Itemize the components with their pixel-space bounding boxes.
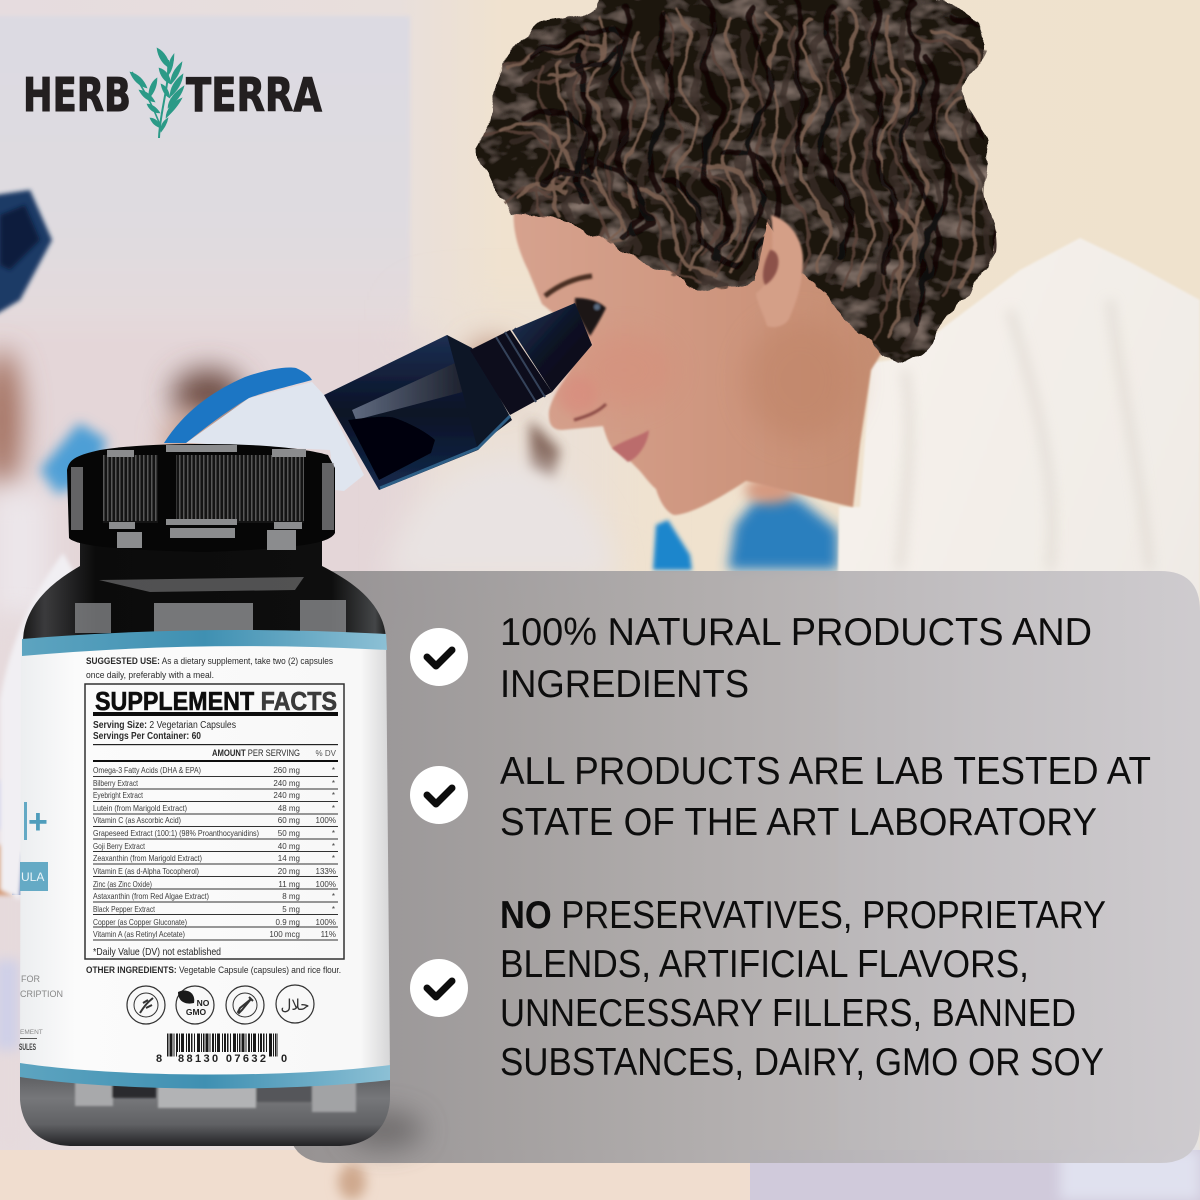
barcode (156, 1045, 287, 1065)
front label fragments (19, 802, 63, 1052)
benefit text 1: 100% NATURAL PRODUCTS AND (500, 611, 1092, 654)
woman: cheek blush (575, 332, 675, 408)
ingredient rows: 100% (316, 816, 336, 825)
grey translucent text panel (288, 571, 1200, 1163)
product bottle (19, 444, 390, 1146)
supplement facts table: *Daily Value (DV) not established (93, 946, 221, 958)
ingredient rows: 50 mg (278, 829, 300, 838)
ingredient rows: 133% (316, 867, 336, 876)
supplement facts table: Serving Size: 2 Vegetarian Capsules (93, 720, 236, 731)
bottle ground shadow (347, 1112, 423, 1148)
head (324, 335, 492, 490)
ingredient rows: 100% (316, 918, 336, 927)
suggested use: once daily, preferably with a meal. (86, 670, 214, 681)
ingredient rows: 40 mg (278, 842, 300, 851)
ingredient rows: 14 mg (278, 854, 300, 863)
ingredient rows: 20 mg (278, 867, 300, 876)
bottle cap (67, 444, 335, 552)
ingredient rows: 100 mcg (269, 930, 300, 939)
ingredient rows: Zinc (as Zinc Oxide) (93, 880, 152, 889)
other ingredients: OTHER INGREDIENTS: Vegetable Capsule (capsules) and rice flour. (86, 965, 341, 976)
benefit text 3: BLENDS, ARTIFICIAL FLAVORS, (500, 943, 1029, 986)
ingredient rows: 11% (321, 930, 336, 939)
ingredient rows: 5 mg (282, 905, 300, 914)
label paper (20, 634, 390, 1080)
front label fragments: CRIPTION (20, 989, 63, 999)
bottom strip below the panel (0, 1150, 1200, 1200)
woman: face and neck (514, 170, 890, 515)
barcode: 0 (281, 1053, 287, 1065)
lower edge (380, 416, 510, 488)
woman: ear (756, 215, 803, 327)
ingredient rows: Bilberry Extract (93, 779, 139, 788)
supplement facts table: Servings Per Container: 60 (93, 731, 201, 742)
top blue band (22, 630, 387, 656)
front label fragments: EMENT (20, 1029, 43, 1036)
supplement facts table: AMOUNT PER SERVING (212, 748, 300, 758)
woman: inner ear (763, 250, 778, 285)
head highlight (352, 363, 470, 420)
ingredient rows: * (332, 842, 335, 851)
cap smooth gap (158, 450, 176, 525)
suggested use: SUGGESTED USE: As a dietary supplement, take two (2) capsules (86, 656, 333, 667)
benefit text 3 (500, 894, 1106, 1084)
ring ridges (496, 328, 552, 402)
ingredient rows: Grapeseed Extract (100:1) (98% Proanthocyanidins) (93, 829, 259, 838)
bottom blue band (20, 1063, 390, 1089)
ingredient rows: * (332, 829, 335, 838)
badge: gluten free (127, 986, 165, 1024)
cap grey facets (71, 445, 334, 550)
benefit text 2: STATE OF THE ART LABORATORY (500, 801, 1097, 844)
ingredient rows: * (332, 854, 335, 863)
ingredient rows: Vitamin E (as d-Alpha Tocopherol) (93, 867, 199, 876)
ingredient rows: 240 mg (273, 779, 300, 788)
barcode: 88130 07632 (178, 1053, 266, 1065)
benefit text 2 (500, 750, 1151, 844)
check icon 1 (410, 628, 468, 686)
ingredient rows: * (332, 779, 335, 788)
woman: neck shadow (745, 320, 855, 440)
ingredient rows: * (332, 905, 335, 914)
benefit text 3: NO PRESERVATIVES, PROPRIETARY (500, 894, 1106, 937)
front label fragments: SULES (19, 1042, 36, 1052)
front label fragments: + (28, 803, 48, 841)
cap ribbed section (103, 455, 304, 523)
knurled ring (470, 330, 552, 415)
badge: no gmo (176, 986, 214, 1024)
ingredient rows: 48 mg (278, 804, 300, 813)
logo leaf sprig (130, 48, 184, 138)
supplement facts table (85, 684, 344, 959)
microscope: eyepiece and head (324, 303, 592, 490)
table heading: SUPPLEMENT FACTS (95, 686, 337, 716)
woman: coat folds (900, 300, 1150, 570)
badge: halal (276, 985, 314, 1023)
ingredient rows: Vitamin A (as Retinyl Acetate) (93, 930, 185, 939)
ingredient rows: * (332, 791, 335, 800)
ingredient rows: 260 mg (273, 766, 300, 775)
barcode: 8 (156, 1053, 162, 1065)
woman: curly hair mass (481, 0, 997, 363)
barrel collar (447, 335, 512, 450)
benefit text 3: UNNECESSARY FILLERS, BANNED (500, 992, 1076, 1035)
shoulder reflections (75, 577, 346, 633)
woman: eyebrow, eye, nostril and lips (545, 276, 649, 462)
benefit text 1 (500, 611, 1092, 706)
ingredient rows: 60 mg (278, 816, 300, 825)
ingredient rows: Eyebright Extract (93, 791, 144, 800)
bottle neck and shoulder (23, 530, 386, 700)
logo (23, 48, 322, 138)
check icon 3 (410, 959, 468, 1017)
badge: no gmo: GMO (186, 1007, 207, 1017)
bottle base glass (20, 1060, 390, 1146)
ingredient rows: 11 mg (278, 880, 300, 889)
dark cutout (348, 417, 435, 480)
badge: no gmo: NO (197, 998, 210, 1008)
ingredient rows: 8 mg (282, 892, 300, 901)
ingredient rows: Astaxanthin (from Red Algae Extract) (93, 892, 209, 901)
eyepiece tube (512, 303, 592, 392)
cap ribs (103, 455, 304, 521)
front label fragments: FOR (21, 974, 40, 984)
ingredient rows: * (332, 804, 335, 813)
logo wordmark TERRA: TERRA (186, 68, 322, 122)
ingredient rows: * (332, 892, 335, 901)
ingredient rows: 100% (316, 880, 336, 889)
badge: no artificial colorants (226, 986, 264, 1024)
ingredient rows: Lutein (from Marigold Extract) (93, 804, 187, 813)
check icon 2 (410, 766, 468, 824)
ingredient rows: 0.9 mg (276, 918, 300, 927)
base reflections (75, 1082, 356, 1112)
woman: white lab coat (838, 238, 1200, 1200)
ingredient rows: Goji Berry Extract (93, 842, 146, 851)
woman: nose shading (558, 375, 598, 415)
ingredient rows: Zeaxanthin (from Marigold Extract) (93, 854, 202, 863)
ingredient rows: Omega-3 Fatty Acids (DHA & EPA) (93, 766, 201, 775)
ingredient rows: Vitamin C (as Ascorbic Acid) (93, 816, 181, 825)
microscope: white and blue arm (164, 367, 364, 491)
logo wordmark HERB: HERB (23, 68, 131, 122)
ingredient rows: * (332, 766, 335, 775)
benefit text 3: SUBSTANCES, DAIRY, GMO OR SOY (500, 1041, 1104, 1084)
suggested use (86, 656, 333, 681)
ingredient rows: Copper (as Copper Gluconate) (93, 918, 187, 927)
microscope: white base left of the bottle (0, 553, 90, 900)
ingredient rows: 240 mg (273, 791, 300, 800)
benefit text 1: INGREDIENTS (500, 663, 749, 706)
ingredient rows (93, 766, 336, 939)
front label fragments: ULA (21, 870, 44, 884)
benefit text 2: ALL PRODUCTS ARE LAB TESTED AT (500, 750, 1151, 793)
badge: halal: حلال (280, 996, 310, 1014)
ingredient rows: Black Pepper Extract (93, 905, 156, 914)
supplement facts table: % DV (316, 749, 337, 758)
woman: curl strands (484, 0, 1004, 347)
